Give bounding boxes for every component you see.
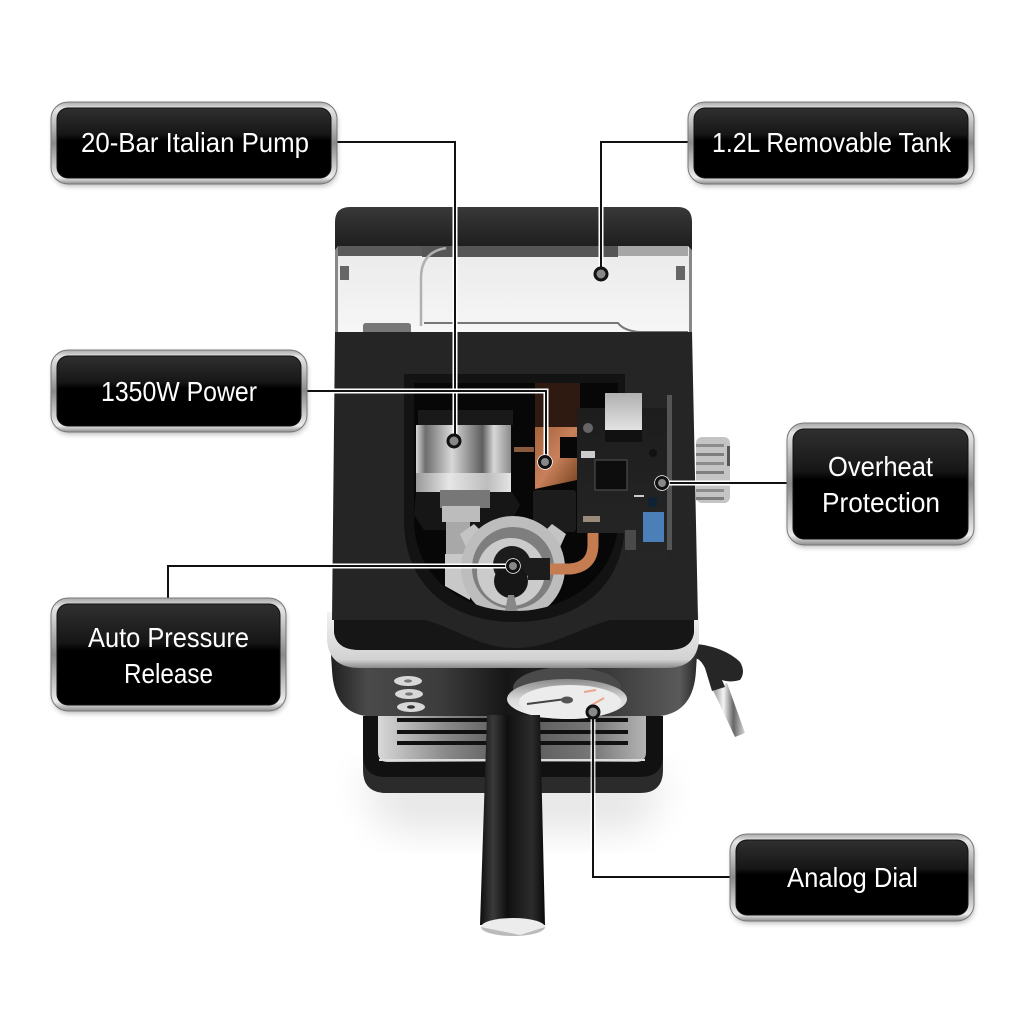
relay bbox=[643, 512, 664, 542]
label: Overheat Protection: Protection bbox=[822, 487, 940, 518]
copper glow bbox=[535, 383, 580, 427]
circuit board bbox=[577, 393, 672, 560]
pressure gauge bbox=[507, 667, 627, 719]
chrome band bbox=[327, 612, 699, 668]
control buttons bbox=[394, 676, 425, 712]
heat sink bbox=[605, 393, 642, 430]
copper pipe bbox=[550, 520, 593, 569]
pump bbox=[414, 425, 520, 556]
drip tray bbox=[363, 716, 663, 793]
stainless grate bbox=[378, 716, 646, 762]
chip bbox=[595, 460, 627, 490]
label: 20-Bar Italian Pump bbox=[51, 102, 337, 186]
portafilter handle bbox=[480, 715, 545, 936]
leader: 1.2L Removable Tank bbox=[595, 142, 688, 280]
tank lid bar bbox=[335, 207, 692, 250]
leader: Auto Pressure Release bbox=[168, 559, 520, 598]
side strip bbox=[667, 395, 672, 550]
label: 1.2L Removable Tank: 1.2L Removable Tank bbox=[712, 127, 952, 158]
label: Overheat Protection: Overheat bbox=[828, 451, 933, 482]
window surround bbox=[404, 374, 625, 622]
leader: Analog Dial bbox=[587, 706, 730, 877]
pipe sleeve bbox=[528, 558, 550, 580]
label: 1.2L Removable Tank bbox=[688, 102, 974, 186]
leader: 1350W Power bbox=[307, 391, 552, 469]
espresso machine bbox=[327, 207, 745, 936]
label: Auto Pressure Release: Release bbox=[124, 658, 213, 689]
front panel bbox=[330, 640, 698, 716]
side knob bbox=[696, 437, 730, 503]
leader: 20-Bar Italian Pump bbox=[337, 142, 460, 447]
label: 20-Bar Italian Pump: 20-Bar Italian Pump bbox=[81, 127, 309, 158]
label: Analog Dial: Analog Dial bbox=[787, 862, 918, 893]
group head bbox=[445, 516, 566, 620]
steam wand bbox=[694, 644, 745, 737]
lower body lip bbox=[334, 620, 694, 650]
label: 1350W Power: 1350W Power bbox=[101, 376, 257, 407]
label: Analog Dial bbox=[730, 834, 974, 923]
water tank bbox=[335, 245, 692, 333]
label: Auto Pressure Release bbox=[51, 598, 286, 713]
label: Auto Pressure Release: Auto Pressure bbox=[88, 622, 249, 653]
main body bbox=[332, 332, 698, 650]
machine shadow bbox=[355, 775, 670, 830]
copper boiler bbox=[514, 427, 577, 532]
label: Overheat Protection bbox=[787, 423, 974, 547]
internals bbox=[412, 378, 618, 620]
label: 1350W Power bbox=[51, 350, 307, 434]
leader: Overheat Protection bbox=[655, 476, 787, 490]
